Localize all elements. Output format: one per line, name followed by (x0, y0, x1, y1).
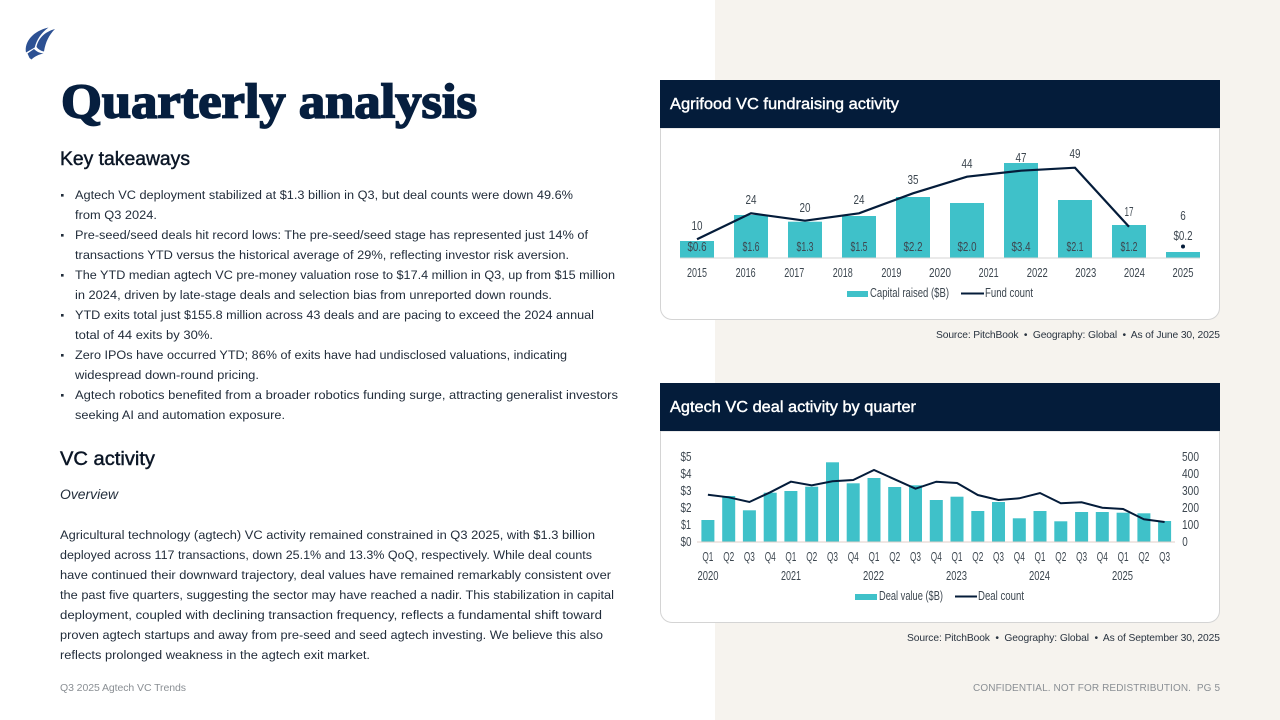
x axis: quarters: Q2 (1055, 549, 1066, 564)
text block: key takeaways bullets: from Q3 2024. (75, 208, 157, 222)
data labels: capital raised: $2.2 (904, 239, 922, 254)
data labels: capital raised: $2.1 (1066, 239, 1084, 254)
left axis: deal value: $2 (680, 500, 692, 515)
left axis: deal value (680, 449, 692, 549)
footer: confidentiality and page number: CONFIDENTIAL. NOT FOR REDISTRIBUTION. PG 5 (973, 683, 1220, 694)
bar chart: deal value (701, 462, 1171, 542)
data labels: fund count: 47 (1016, 150, 1026, 165)
data labels: capital raised (688, 228, 1192, 254)
marker: 2025 dot (1181, 244, 1185, 248)
right axis: deal count: 0 (1182, 534, 1188, 549)
left axis: deal value: $1 (681, 517, 691, 532)
left axis: deal value: $0 (680, 534, 692, 549)
x axis: years: 2021 (979, 265, 999, 280)
text block: key takeaways bullets: Pre-seed/seed deals hit record lows: The pre-seed/seed stage has represented just 14% of (75, 228, 589, 242)
x axis: years: 2023 (1075, 265, 1096, 280)
footer: report name: Q3 2025 Agtech VC Trends (60, 682, 186, 694)
x axis: years: 2024 (1124, 265, 1145, 280)
text block: key takeaways bullets: total of 44 exits by 30%. (75, 328, 213, 342)
x axis: quarters: Q3 (1159, 549, 1170, 564)
text block: overview paragraph: Agricultural technology (agtech) VC activity remained constrained in Q3 2025, with $1.3 billion (60, 528, 595, 542)
source note: deal activity chart: Source: PitchBook • Geography: Global • As of September 30, 2025 (907, 633, 1220, 644)
right axis: deal count (1182, 449, 1199, 549)
panel heading: Agtech VC deal activity by quarter (670, 399, 916, 416)
text block: key takeaways bullets: The YTD median agtech VC pre-money valuation rose to $17.4 million in Q3, up from $15 million (75, 268, 615, 282)
x axis: quarters: Q1 (1034, 549, 1046, 564)
subheading: overview: Overview (60, 487, 119, 502)
panel heading: Agrifood VC fundraising activity (670, 96, 899, 113)
x axis: quarters: Q4 (765, 549, 776, 564)
x axis: years: 2018 (833, 265, 853, 280)
x axis: years: 2015 (687, 265, 707, 280)
x axis: quarters: Q1 (1118, 549, 1129, 564)
panel: Agtech VC deal activity by quarter (660, 383, 1220, 622)
x axis: quarters: Q1 (785, 549, 796, 564)
right axis: deal count: 300 (1182, 483, 1199, 498)
text block: overview paragraph: deployed across 117 transactions, down 25.1% and 13.3% QoQ, respectively. While deal counts (60, 548, 592, 562)
text block: overview paragraph: proven agtech startups and away from pre-seed and seed agtech investing. We believe this also (60, 628, 603, 642)
source note: fundraising chart: Source: PitchBook • Geography: Global • As of June 30, 2025 (936, 330, 1220, 341)
x axis: quarters: Q3 (827, 549, 838, 564)
x axis: years (698, 568, 1133, 583)
x axis: years: 2024 (1029, 568, 1050, 583)
text block: key takeaways bullets: seeking AI and automation exposure. (75, 408, 285, 422)
x axis: years: 2022 (1027, 265, 1048, 280)
data labels: capital raised: $1.2 (1120, 239, 1138, 254)
data labels: capital raised: $0.6 (688, 239, 706, 254)
x axis: quarters: Q2 (806, 549, 817, 564)
left axis: deal value: $5 (680, 449, 692, 464)
data labels: fund count: 10 (692, 218, 702, 233)
text block: overview paragraph: the past five quarters, suggesting the sector may have reached a nadir. This stabilization in capital (60, 588, 614, 602)
data labels: fund count: 20 (800, 200, 810, 215)
text block: key takeaways bullets: Agtech VC deployment stabilized at $1.3 billion in Q3, but deal counts were down 49.6% (75, 188, 573, 202)
right axis: deal count: 400 (1182, 466, 1199, 481)
legend (847, 285, 1033, 300)
x axis: quarters (702, 549, 1170, 564)
x axis: quarters: Q1 (702, 549, 713, 564)
x axis: years: 2017 (784, 265, 804, 280)
legend: Deal count (978, 588, 1024, 603)
heading: VC activity: VC activity (60, 448, 155, 470)
x axis: years: 2016 (736, 265, 756, 280)
icon: sail logo (26, 28, 55, 60)
right axis: deal count: 100 (1182, 517, 1199, 532)
right axis: deal count: 500 (1182, 449, 1199, 464)
x axis: quarters: Q3 (744, 549, 755, 564)
x axis: quarters: Q2 (889, 549, 900, 564)
x axis: years: 2023 (946, 568, 967, 583)
text block: key takeaways bullets: widespread down-round pricing. (74, 368, 259, 382)
x axis: quarters: Q2 (723, 549, 734, 564)
x axis: quarters: Q1 (952, 549, 962, 564)
x axis: years (687, 265, 1194, 280)
x axis: quarters: Q3 (993, 549, 1004, 564)
legend: Deal value ($B) (879, 588, 943, 603)
text block: key takeaways bullets: Zero IPOs have occurred YTD; 86% of exits have had undisclosed valuations, indicating (75, 348, 567, 362)
data labels: capital raised: $3.4 (1012, 239, 1030, 254)
data labels: capital raised: $1.6 (742, 239, 760, 254)
text block: key takeaways bullets: transactions YTD versus the historical average of 29%, reflecting investor risk aversion. (75, 248, 569, 262)
x axis: quarters: Q4 (1014, 549, 1025, 564)
legend: Fund count (985, 285, 1033, 300)
x axis: quarters: Q4 (931, 549, 942, 564)
text block: key takeaways bullets: YTD exits total just $155.8 million across 43 deals and are pacing to exceed the 2024 annual (75, 308, 594, 322)
data labels: capital raised: $0.2 (1174, 228, 1192, 243)
text block: overview paragraph: deployment, coupled with declining transaction frequency, reflects a fundamental shift toward (60, 608, 602, 622)
data labels: fund count: 6 (1180, 208, 1186, 223)
x axis: years: 2022 (863, 568, 884, 583)
panel: Agrifood VC fundraising activity (660, 80, 1220, 320)
data labels: fund count: 24 (854, 192, 864, 207)
data labels: fund count: 49 (1070, 146, 1080, 161)
x axis: quarters: Q3 (910, 549, 921, 564)
left axis: deal value: $3 (680, 483, 692, 498)
legend: Capital raised ($B) (870, 285, 949, 300)
title: Quarterly analysis (61, 74, 477, 128)
x axis: years: 2020 (698, 568, 718, 583)
x axis: years: 2021 (781, 568, 801, 583)
x axis: years: 2020 (929, 265, 951, 280)
data labels: fund count (692, 146, 1186, 233)
x axis: years: 2025 (1172, 265, 1194, 280)
data labels: fund count: 17 (1124, 204, 1134, 219)
x axis: quarters: Q4 (1097, 549, 1108, 564)
text block: overview paragraph (60, 528, 614, 662)
text block: key takeaways bullets (61, 188, 618, 422)
text block: overview paragraph: reflects prolonged weakness in the agtech exit market. (60, 648, 370, 662)
text block: overview paragraph: have continued their downward trajectory, deal values have remained remarkably consistent over (60, 568, 611, 582)
x axis: quarters: Q3 (1076, 549, 1087, 564)
data labels: fund count: 44 (962, 156, 972, 171)
x axis: quarters: Q2 (1138, 549, 1149, 564)
x axis: years: 2025 (1112, 568, 1133, 583)
text block: key takeaways bullets: Agtech robotics benefited from a broader robotics funding surge, attracting generalist investors (75, 388, 618, 402)
x axis: quarters: Q4 (848, 549, 859, 564)
heading: key takeaways: Key takeaways (60, 148, 190, 170)
left axis: deal value: $4 (680, 466, 692, 481)
x axis: years: 2019 (881, 265, 901, 280)
data labels: fund count: 24 (746, 192, 756, 207)
data labels: capital raised: $2.0 (958, 239, 976, 254)
line: fund count (697, 168, 1129, 239)
legend (855, 588, 1024, 603)
bar chart: capital raised (680, 163, 1200, 258)
data labels: capital raised: $1.3 (796, 239, 814, 254)
x axis: quarters: Q2 (972, 549, 983, 564)
data labels: fund count: 35 (908, 172, 918, 187)
x axis: quarters: Q1 (868, 549, 880, 564)
data labels: capital raised: $1.5 (850, 239, 868, 254)
text block: key takeaways bullets: in 2024, driven by late-stage deals and selection bias from unreported down rounds. (75, 288, 552, 302)
line: deal count (708, 470, 1165, 522)
right axis: deal count: 200 (1182, 500, 1199, 515)
